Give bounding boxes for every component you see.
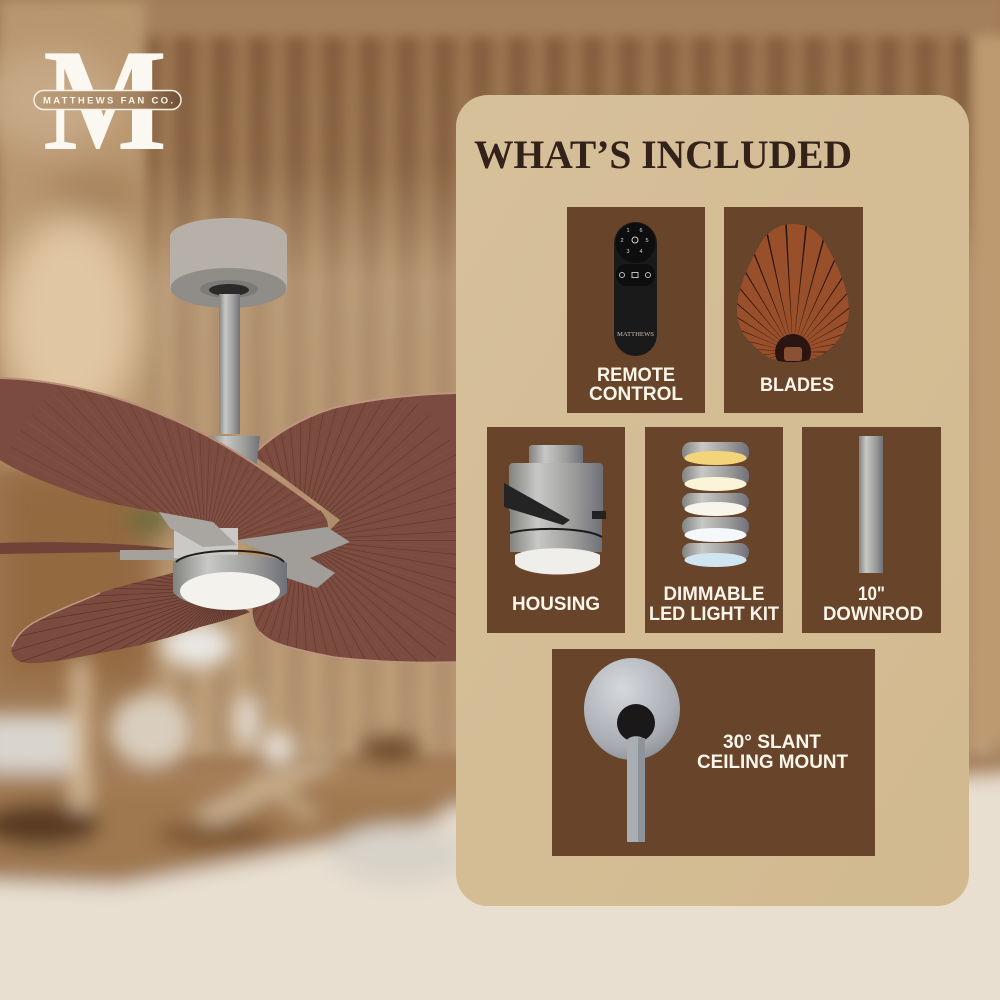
card: dimmable LED light kit <box>645 427 783 633</box>
logo: Matthews Fan Co.: MATTHEWS FAN CO. <box>43 96 173 106</box>
label: HOUSING <box>512 594 600 615</box>
label: DOWNROD <box>823 604 923 625</box>
icon: remote: 5 <box>645 238 649 244</box>
label <box>589 365 683 405</box>
label: 10" <box>858 584 885 605</box>
icon: palm blade <box>737 224 849 362</box>
card: slant ceiling mount <box>552 649 875 856</box>
downrod <box>219 294 240 434</box>
icon: slant mount <box>584 658 680 842</box>
icon: remote: 6 <box>639 228 643 234</box>
icon: remote: 4 <box>639 249 643 255</box>
icon: remote: MATTHEWS <box>617 332 654 338</box>
heading: WHAT’S INCLUDED <box>474 132 852 177</box>
label: 30° SLANT <box>723 732 821 753</box>
card: blades <box>724 207 863 420</box>
label <box>697 732 848 773</box>
logo: Matthews Fan Co.: M <box>43 19 167 181</box>
icon: remote: 1 <box>626 228 630 234</box>
motor collar <box>210 436 260 470</box>
fan blade: thin side-on left <box>0 542 175 554</box>
label <box>649 584 779 625</box>
LED light housing <box>173 551 287 610</box>
card: downrod <box>802 427 941 633</box>
ceiling fan <box>0 218 456 664</box>
icon: remote: 3 <box>626 249 630 255</box>
label <box>823 584 923 625</box>
label: LED LIGHT KIT <box>649 604 779 625</box>
icon: remote: 2 <box>620 238 624 244</box>
icon: housing <box>504 445 606 574</box>
card: remote control <box>567 207 705 413</box>
label: BLADES <box>760 375 834 396</box>
icon: downrod <box>859 436 883 573</box>
fan blade: lower left <box>11 572 250 664</box>
card: housing <box>487 427 625 633</box>
fan blade: upper left <box>0 377 328 540</box>
blade brackets and motor <box>120 512 350 588</box>
fan blade: right <box>252 392 456 663</box>
label: REMOTE <box>597 365 675 386</box>
icon: remote <box>614 222 657 356</box>
label: DIMMABLE <box>664 584 764 605</box>
ceiling canopy <box>170 218 287 308</box>
label: CEILING MOUNT <box>697 752 848 773</box>
panel: what's included <box>456 95 969 906</box>
icon: five LED discs <box>682 442 749 567</box>
label: CONTROL <box>589 384 683 405</box>
